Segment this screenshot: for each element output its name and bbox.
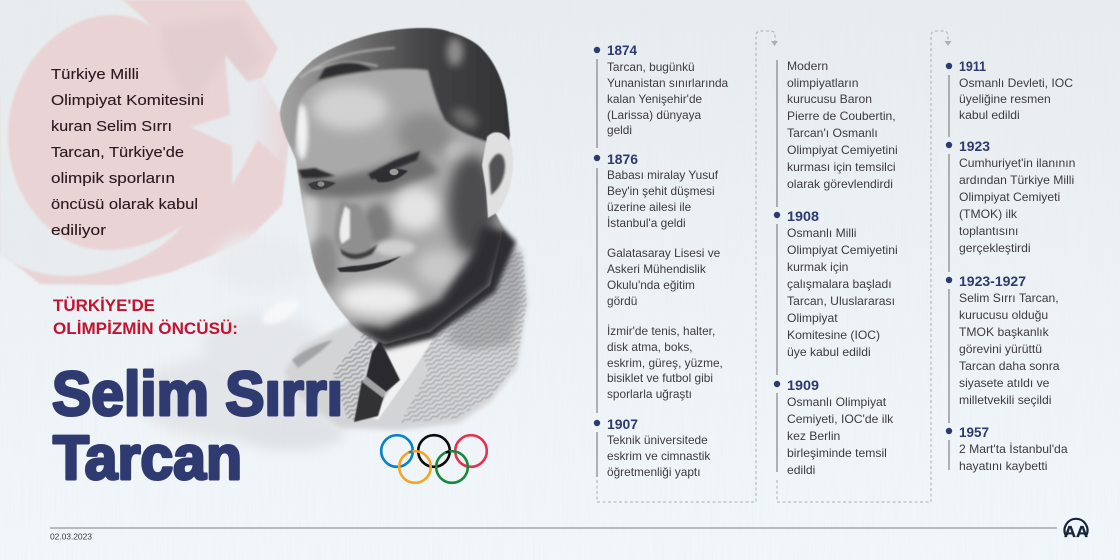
entry 1874: (Larissa) dünyaya [607, 108, 702, 122]
entry 1907: öğretmenliği yaptı [607, 465, 700, 479]
entry 1907: eskrim ve cimnastik [607, 449, 710, 463]
lower flag fade [214, 234, 310, 290]
forehead highlight [312, 86, 388, 130]
entry 1874: kalan Yenişehir'de [607, 92, 703, 106]
entry 1911: kabul edildi [959, 108, 1020, 122]
entry 1908 [787, 208, 898, 359]
entry 1923-1927: siyasete atıldı ve [959, 376, 1050, 390]
timeline spine 3 [948, 75, 950, 470]
eyes [308, 169, 408, 190]
intro text: Tarcan, Türkiye'de [51, 144, 184, 161]
entry 1923: (TMOK) ilk [959, 207, 1018, 221]
entry 1957 [959, 424, 1068, 473]
intro text: olimpik sporların [51, 170, 175, 187]
intro text [51, 66, 204, 239]
entry Baron de Coubertin: Pierre de Coubertin, [787, 109, 896, 123]
entry 1911: Osmanlı Devleti, IOC [959, 76, 1073, 90]
entry 1923 [959, 138, 1075, 255]
bullets 1 [594, 47, 600, 426]
moustache area light [375, 240, 415, 256]
cheek highlight [392, 187, 440, 231]
entry 1876: İzmir'de tenis, halter, [607, 324, 715, 338]
bullets 2 [774, 212, 780, 387]
entry 1957: hayatını kaybetti [959, 459, 1047, 473]
entry 1909: 1909 [787, 377, 819, 393]
entry 1876: Askeri Mühendislik [607, 262, 706, 276]
title: Selim Sırrı [52, 360, 343, 429]
entry Baron de Coubertin [787, 59, 898, 191]
entry Baron de Coubertin: kurması için temsilci [787, 160, 896, 174]
entry 1923-1927: TMOK başkanlık [959, 325, 1050, 339]
hair [280, 27, 511, 148]
entry Baron de Coubertin: Tarcan'ı Osmanlı [787, 126, 878, 140]
entry Baron de Coubertin: Olimpiyat Cemiyetini [787, 143, 898, 157]
flag muddy patches [160, 15, 265, 110]
entry 1909: kez Berlin [787, 429, 840, 443]
entry 1923-1927 [959, 273, 1060, 407]
jacket left weave [333, 330, 376, 420]
left shoulder streak [292, 340, 333, 368]
face base [286, 67, 503, 344]
timeline column 1 [594, 31, 778, 502]
entry 1909 [787, 377, 894, 477]
entry 1874: Tarcan, bugünkü [607, 60, 695, 74]
entry 1923-1927: Selim Sırrı Tarcan, [959, 291, 1059, 305]
jacket right shade [445, 240, 522, 350]
timeline column 3 [946, 58, 1075, 473]
entry 1876: Babası miralay Yusuf [607, 168, 719, 182]
entry 1876: Bey'in şehit düşmesi [607, 184, 715, 198]
entry 1876: İstanbul'a geldi [607, 216, 686, 230]
subtitle: TÜRKİYE'DE [53, 296, 155, 315]
eyebrows [298, 151, 420, 180]
entry 1911 [959, 58, 1073, 122]
date: 02.03.2023 [50, 532, 92, 542]
dark hair patch [318, 63, 372, 80]
ear [482, 132, 513, 218]
title [52, 360, 343, 493]
flag crescent [0, 0, 183, 276]
title: Tarcan [53, 424, 242, 493]
right face shade [448, 155, 496, 255]
footer rule [50, 527, 1057, 529]
entry 1923-1927: Tarcan daha sonra [959, 359, 1060, 373]
eye socket shade [298, 150, 440, 198]
entry Baron de Coubertin: olarak görevlendirdi [787, 177, 893, 191]
portrait [270, 20, 527, 430]
entry 1923: Olimpiyat Cemiyeti [959, 190, 1060, 204]
entry 1874: geldi [607, 123, 632, 137]
nose [335, 200, 378, 260]
mouth [337, 256, 401, 272]
left face light [300, 185, 318, 245]
entry 1923: ardından Türkiye Milli [959, 173, 1074, 187]
entry Baron de Coubertin: olimpiyatların [787, 76, 859, 90]
connector arrow 2 [777, 31, 952, 502]
entry 1923-1927: kurucusu olduğu [959, 308, 1048, 322]
subtitle: OLİMPİZMİN ÖNCÜSÜ: [53, 319, 238, 338]
timeline spine 2 [776, 60, 778, 472]
head [280, 27, 511, 344]
entry 1908: Olimpiyat Cemiyetini [787, 243, 898, 257]
lower cheek light [416, 250, 460, 286]
hair side light [450, 105, 480, 131]
lower left cheek shade [312, 236, 338, 288]
entry 1874: Yunanistan sınırlarında [607, 76, 729, 90]
timeline column 2 [774, 31, 952, 502]
jaw shadow [350, 225, 510, 346]
icon: AA logo: AA [1064, 524, 1088, 541]
entry 1874 [607, 42, 729, 137]
entry 1907: 1907 [607, 416, 638, 432]
intro text: Olimpiyat Komitesini [51, 92, 204, 109]
jacket right weave [400, 240, 527, 423]
entry 1908: kurmak için [787, 260, 848, 274]
jacket [284, 228, 527, 430]
entry 1909: edildi [787, 463, 815, 477]
entry Baron de Coubertin: kurucusu Baron [787, 92, 872, 106]
entry 1908: üye kabul edildi [787, 345, 871, 359]
temple light [446, 142, 470, 162]
light blotch [258, 295, 302, 329]
shirt collar [368, 326, 434, 420]
intro text: kuran Selim Sırrı [51, 118, 172, 135]
entry 1876: disk atma, boks, [607, 340, 693, 354]
entry 1876: bisiklet ve futbol gibi [607, 371, 713, 385]
timeline spine 1 [596, 59, 598, 477]
intro text: Türkiye Milli [51, 66, 139, 83]
icon: olympic rings [381, 435, 487, 483]
entry 1909: Osmanlı Olimpiyat [787, 395, 887, 409]
entry 1908: Olimpiyat [787, 311, 838, 325]
nose side shade [363, 204, 393, 244]
chin highlight [338, 282, 418, 316]
entry 1911: 1911 [959, 58, 986, 74]
entry 1908: 1908 [787, 208, 819, 224]
flag star [190, 55, 292, 186]
entry 1957: 2 Mart'ta İstanbul'da [959, 442, 1068, 456]
entry 1876: sporlarla uğraştı [607, 387, 692, 401]
entry 1876: gördü [607, 294, 637, 308]
entry 1908: çalışmalara başladı [787, 277, 892, 291]
entry 1957: 1957 [959, 424, 989, 440]
entry 1923-1927: 1923-1927 [959, 273, 1026, 289]
connector arrow 1 [597, 31, 778, 502]
entry 1876: Galatasaray Lisesi ve [607, 246, 721, 260]
entry 1907: Teknik üniversitede [607, 433, 708, 447]
entry 1909: birleşiminde temsil [787, 446, 887, 460]
forehead right tone [397, 113, 453, 157]
entry 1874: 1874 [607, 42, 637, 58]
entry 1876 [607, 151, 723, 401]
entry 1908: Komitesine (IOC) [787, 328, 880, 342]
entry Baron de Coubertin: Modern [787, 59, 828, 73]
entry 1923: toplantısını [959, 224, 1018, 238]
entry 1907 [607, 416, 710, 479]
hair strands [300, 48, 395, 78]
entry 1876: üzerine ailesi ile [607, 200, 692, 214]
entry 1911: üyeliğine resmen [959, 92, 1051, 106]
bullets 3 [946, 63, 952, 434]
entry 1876: Okulu'nda eğitim [607, 278, 695, 292]
entry 1923: 1923 [959, 138, 990, 154]
entry 1908: Tarcan, Uluslararası [787, 294, 895, 308]
forehead edge light [296, 104, 308, 160]
entry 1909: Cemiyeti, IOC'de ilk [787, 412, 894, 426]
entry 1876: eskrim, güreş, yüzme, [607, 356, 723, 370]
smoke under portrait [135, 313, 345, 450]
neck shadow [350, 215, 516, 350]
subtitle [53, 296, 238, 338]
tie [354, 340, 400, 422]
entry 1923: Cumhuriyet'in ilanının [959, 156, 1075, 170]
intro text: öncüsü olarak kabul [51, 196, 198, 213]
entry 1923: gerçekleştirdi [959, 241, 1031, 255]
flag backdrop [0, 0, 345, 450]
entry 1923-1927: görevini yürüttü [959, 342, 1042, 356]
intro text: ediliyor [51, 222, 106, 239]
entry 1923-1927: milletvekili seçildi [959, 393, 1051, 407]
entry 1908: Osmanlı Milli [787, 226, 856, 240]
flag red wash [0, 0, 290, 285]
hair highlight [447, 38, 463, 66]
entry 1876: 1876 [607, 151, 638, 167]
